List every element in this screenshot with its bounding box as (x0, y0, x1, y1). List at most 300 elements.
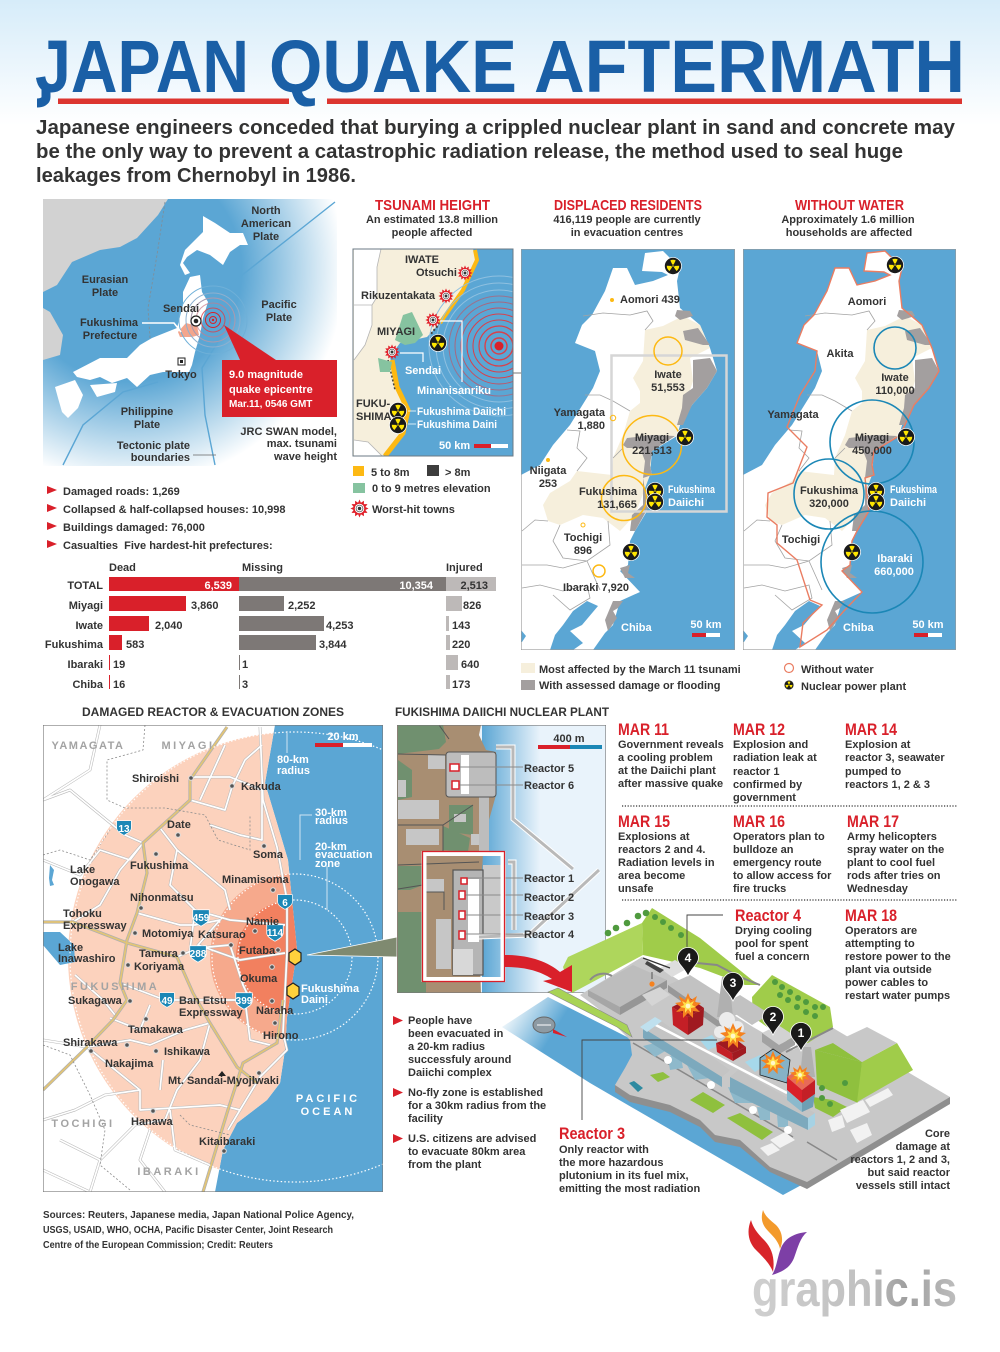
callout pins (678, 948, 812, 1051)
MAR 16: to allow access for (733, 870, 832, 882)
logo: graphic.is (749, 1210, 957, 1317)
evacuation bullets: to evacuate 80km area (408, 1146, 526, 1158)
values: 10,354 (399, 580, 434, 592)
tectonic labels: Plate (92, 287, 118, 299)
values: 640 (461, 659, 479, 671)
place labels: Tamakawa (128, 1024, 184, 1036)
place labels: Katsurao (198, 929, 246, 941)
place labels: Lake (70, 864, 95, 876)
evacuation bullets: Daiichi complex (408, 1067, 493, 1079)
place labels: Expressway (63, 920, 127, 932)
text: reactor 4: fuel a concern (735, 951, 810, 963)
evacuation bullets: been evacuated in (408, 1028, 504, 1040)
green strip patches (650, 1072, 773, 1140)
tectonic labels: Prefecture (83, 330, 137, 342)
place labels: Ban Etsu (179, 995, 227, 1007)
heading: without water: households are affected (786, 227, 912, 239)
water labels (767, 296, 944, 634)
water labels: Iwate (881, 372, 909, 384)
MAR 17 (847, 813, 944, 895)
tsunami labels: 50 km (439, 440, 470, 452)
evacuation bullets: facility (408, 1113, 444, 1125)
timeline: March events (618, 721, 957, 1002)
reactor 2 building (760, 1049, 790, 1083)
place labels: 20-km (315, 841, 347, 853)
back hill (563, 908, 760, 993)
isometric plant illustration (502, 908, 950, 1195)
values: 3 (242, 679, 248, 691)
small front buildings (643, 1043, 788, 1127)
text: reactor 4: pool for spent (735, 938, 809, 950)
place labels: Okuma (240, 973, 278, 985)
MAR 12: radiation leak at (733, 752, 817, 764)
place labels: TOCHIGI (51, 1118, 115, 1130)
values: 173 (452, 679, 470, 691)
MAR 18: Operators are (845, 925, 917, 937)
title (35, 25, 965, 108)
displaced labels: Ibaraki 7,920 (563, 582, 629, 594)
MAR 18: restart water pumps (845, 990, 950, 1002)
tsunami labels: FUKU- (356, 398, 391, 410)
map: tsunami height (352, 248, 514, 456)
water circles (794, 327, 923, 613)
MAR 15 (618, 813, 715, 895)
MAR 14: Explosion at (845, 739, 911, 751)
water labels: Akita (827, 348, 854, 360)
water labels: 320,000 (809, 498, 849, 510)
legend: affected areas: Most affected by the March 11 tsunami (539, 664, 741, 676)
tsunami labels: Rikuzentakata (361, 290, 436, 302)
place labels: Kakuda (241, 781, 282, 793)
smoke plume (714, 1012, 744, 1038)
turbine hall 2 (730, 1070, 815, 1130)
legend: tsunami: 0 to 9 metres elevation (372, 483, 491, 495)
evacuation bullets: from the plant (408, 1159, 482, 1171)
connector line to displaced map (513, 372, 611, 374)
tsunami labels: IWATE (405, 254, 439, 266)
reactor 4 building (672, 998, 704, 1035)
reactor markers (450, 764, 467, 939)
water labels: 660,000 (874, 566, 914, 578)
row labels: TOTAL (67, 580, 103, 592)
MAR 16: Operators plan to (733, 831, 825, 843)
intro text (36, 116, 956, 187)
values: 19 (113, 659, 125, 671)
MAR 17: MAR 17 (847, 813, 899, 831)
tsunami labels: MIYAGI (377, 326, 415, 338)
highway shields: 114 (267, 928, 284, 939)
heading: without water (781, 197, 915, 239)
callout line: reactor 4 (687, 915, 723, 947)
bar chart: casualties: Dead (109, 562, 136, 574)
compass (533, 1017, 567, 1037)
MAR 12: Explosion and (733, 739, 808, 751)
place labels: Expressway (179, 1007, 243, 1019)
tectonic labels: wave height (273, 451, 337, 463)
dotted radius circles (69, 731, 382, 1183)
place labels: radius (315, 815, 348, 827)
missing bars (239, 577, 446, 689)
values: 1 (242, 659, 248, 671)
values: 2,513 (460, 580, 488, 592)
MAR 18: restore power to the (845, 951, 951, 963)
tectonic labels: Fukushima (80, 317, 139, 329)
tectonic labels: Plate (134, 419, 160, 431)
tsunami labels: Fukushima Daiichi (417, 406, 506, 418)
tectonic labels: JRC SWAN model, (240, 426, 337, 438)
place labels: Koriyama (134, 961, 185, 973)
place labels: zone (315, 858, 340, 870)
tsunami labels: Sendai (405, 365, 441, 377)
main buildings (588, 960, 795, 1054)
reactor 3 building (716, 1037, 746, 1061)
place labels: Fukushima (301, 983, 360, 995)
place labels: 80-km (277, 754, 309, 766)
MAR 12: MAR 12 (733, 721, 785, 739)
epicentre callout: Mar.11, 0546 GMT (229, 399, 312, 410)
tsunami labels: Fukushima Daini (417, 419, 497, 431)
place labels: Nihonmatsu (130, 892, 194, 904)
water labels: Tochigi (782, 534, 820, 546)
roads (398, 725, 479, 910)
highway shields: 399 (236, 996, 253, 1007)
tectonic labels: American (241, 218, 291, 230)
MAR 14: reactors 1, 2 & 3 (845, 779, 930, 791)
title: JAPAN (35, 25, 249, 108)
title: AFTERMATH (534, 25, 965, 108)
tectonic labels: Plate (253, 231, 279, 243)
MAR 11: MAR 11 (618, 721, 669, 739)
stacks (717, 977, 815, 1077)
tectonic labels: Eurasian (82, 274, 129, 286)
plant icons (843, 256, 915, 561)
MAR 11: Government reveals (618, 739, 724, 751)
sources: Centre of the European Commission; Credit: Reuters (43, 1239, 273, 1251)
evacuation rings on land (68, 732, 297, 1170)
tsunami labels: Minanisanriku (417, 385, 491, 397)
prefecture borders (43, 725, 250, 1190)
highway shields: 459 (193, 913, 210, 924)
heading: displaced residents: DISPLACED RESIDENTS (554, 197, 702, 214)
bar chart: casualties (45, 562, 496, 691)
tectonic labels: max. tsunami (267, 438, 337, 450)
text: core damage: damage at (896, 1141, 950, 1153)
MAR 16: emergency route (733, 857, 822, 869)
place labels: Namie (246, 916, 279, 928)
displaced labels: 221,513 (632, 445, 672, 457)
page background (0, 0, 1000, 125)
evacuation circles (546, 298, 682, 577)
legend: tsunami: > 8m (445, 467, 471, 479)
place labels: Lake (58, 942, 83, 954)
heading: tsunami height: An estimated 13.8 million (366, 214, 498, 226)
text: reactor 3: Only reactor with (559, 1144, 649, 1156)
displaced labels: Iwate (654, 369, 682, 381)
place labels: 30-km (315, 807, 347, 819)
place labels: Hirono (263, 1030, 299, 1042)
text: core damage: but said reactor (867, 1167, 951, 1179)
reactor labels: Reactor 5 (524, 763, 574, 775)
values: 826 (463, 600, 481, 612)
row labels: Chiba (72, 679, 104, 691)
map: tectonic plates (43, 199, 337, 466)
displaced labels: 50 km (690, 619, 722, 631)
text: reactor 3 (559, 1125, 700, 1195)
row labels (45, 580, 104, 691)
place labels: Shiroishi (132, 773, 179, 785)
MAR 18: MAR 18 (845, 907, 897, 925)
heading: tsunami height: people affected (392, 227, 472, 239)
MAR 14 (845, 721, 945, 791)
water labels: Miyagi (855, 432, 889, 444)
MAR 18: power cables to (845, 977, 928, 989)
water labels: Fukushima (800, 485, 859, 497)
callout line: reactor 3 (582, 1040, 717, 1120)
text: reactor 3: the more hazardous (559, 1157, 664, 1169)
aerial callout lines (459, 767, 523, 934)
sources (43, 1209, 354, 1251)
displaced labels: 131,665 (597, 499, 637, 511)
place labels: Iwaki (252, 1075, 279, 1087)
highway shields: 288 (190, 949, 207, 960)
third hill (815, 1027, 913, 1103)
map: reactor and evacuation zones (43, 725, 383, 1192)
MAR 18: attempting to (845, 938, 915, 950)
reactor labels: Reactor 6 (524, 780, 574, 792)
marker: Tokyo (178, 358, 185, 365)
ground side (615, 1085, 950, 1189)
place labels: Tamura (139, 948, 179, 960)
text: core damage: reactors 1, 2 and 3, (850, 1154, 950, 1166)
text: reactor 4: Reactor 4 (735, 907, 802, 925)
zoom wedge from map to plant (307, 937, 397, 957)
displaced labels: Fukushima (579, 486, 638, 498)
displaced labels (530, 294, 722, 634)
bar chart: casualties: Injured (446, 562, 483, 574)
town dots (89, 776, 280, 1153)
values: 2,040 (155, 620, 183, 632)
heading: without water: WITHOUT WATER (795, 197, 904, 214)
MAR 18 (845, 907, 951, 1002)
displaced labels: Daiichi (668, 497, 704, 509)
map: displaced residents (521, 249, 735, 650)
reactor labels: Reactor 1 (524, 873, 574, 885)
place labels: Shirakawa (63, 1037, 118, 1049)
MAR 11: after massive quake (618, 778, 723, 790)
displaced labels: Tochigi (564, 532, 602, 544)
damage list: Buildings damaged: 76,000 (63, 522, 205, 534)
land (397, 725, 496, 993)
values: 3,860 (191, 600, 219, 612)
place labels: Mt. Sandai-Myoji (168, 1075, 255, 1087)
place labels: Kitaibaraki (199, 1136, 255, 1148)
tectonic labels: Plate (266, 312, 292, 324)
reactor labels (524, 733, 585, 941)
plant icons (622, 257, 694, 561)
row labels: Fukushima (45, 639, 104, 651)
road network (43, 725, 287, 1192)
MAR 18: plant via outside (845, 964, 932, 976)
place labels: Nakajima (105, 1058, 154, 1070)
tsunami labels (356, 254, 506, 452)
dead bars (109, 577, 239, 689)
tectonic labels: Tokyo (165, 369, 197, 381)
legend: tsunami: 5 to 8m (371, 467, 410, 479)
tectonic labels: Pacific (261, 299, 297, 311)
MAR 16: MAR 16 (733, 813, 785, 831)
place labels (51, 731, 373, 1178)
water labels: Chiba (843, 622, 874, 634)
highway shields (117, 821, 292, 1009)
MAR 15: Explosions at (618, 831, 690, 843)
text: reactor 3: emitting the most radiation (559, 1183, 700, 1195)
reactor labels: 400 m (553, 733, 585, 745)
heading: evacuation zones: DAMAGED REACTOR & EVACUATION ZONES (82, 705, 344, 719)
displaced labels: 1,880 (577, 420, 605, 432)
epicentre callout: quake epicentre (229, 384, 313, 396)
legend: tsunami: Worst-hit towns (372, 504, 455, 516)
place labels: Futaba (239, 945, 276, 957)
breakwaters (479, 747, 599, 937)
displaced labels: Aomori 439 (620, 294, 680, 306)
lakes (43, 932, 75, 965)
displaced labels: Miyagi (635, 432, 669, 444)
green patch by reactor 1 (813, 1097, 847, 1117)
values: 3,844 (319, 639, 347, 651)
values: 6,539 (204, 580, 232, 592)
tsunami labels: Otsuchi (416, 267, 457, 279)
callout pins: 1 (798, 1026, 805, 1040)
place labels: Hanawa (131, 1116, 173, 1128)
values: 16 (113, 679, 125, 691)
tsunami labels: SHIMA (356, 411, 392, 423)
MAR 16 (733, 813, 832, 895)
reactor 1 building (787, 1068, 815, 1112)
damage list: Collapsed & half-collapsed houses: 10,998 (63, 504, 286, 516)
heading: plant: FUKISHIMA DAIICHI NUCLEAR PLANT (395, 705, 610, 719)
injured bars (446, 577, 496, 689)
heading: displaced residents (553, 197, 702, 239)
water labels: Yamagata (767, 409, 820, 421)
tectonic labels (80, 205, 337, 464)
sources: Sources: Reuters, Japanese media, Japan National Police Agency, (43, 1209, 354, 1221)
MAR 14: MAR 14 (845, 721, 898, 739)
red frame (424, 854, 503, 980)
logo: graphic.is: graphic.is (752, 1261, 957, 1317)
water labels: Aomori (848, 296, 886, 308)
evacuation bullets: U.S. citizens are advised (408, 1133, 536, 1145)
evacuation bullets: No-fly zone is established (408, 1087, 543, 1099)
MAR 14: pumped to (845, 766, 901, 778)
grey building blocks (398, 755, 479, 969)
helicopter (643, 958, 670, 987)
tectonic labels: Sendai (163, 303, 199, 315)
place labels: Tohoku (63, 908, 102, 920)
MAR 12 (733, 721, 817, 804)
tectonic labels: Tectonic plate (117, 440, 190, 452)
place labels: 20 km (327, 731, 359, 743)
MAR 12: reactor 1 (733, 766, 779, 778)
MAR 11 (618, 721, 724, 790)
place labels: Onogawa (70, 876, 120, 888)
text: core damage: Core (925, 1128, 950, 1140)
logo flame (749, 1210, 807, 1275)
place labels: MIYAGI (161, 740, 215, 752)
MAR 11: a cooling problem (618, 752, 713, 764)
highway shields: 6 (282, 898, 288, 909)
icons: towns and plants (384, 265, 473, 434)
trees (605, 910, 848, 1107)
water labels: Fukushima (890, 484, 938, 496)
reactor labels: Reactor 4 (524, 929, 575, 941)
values: 220 (452, 639, 470, 651)
evacuation bullets: for a 30km radius from the (408, 1100, 546, 1112)
heading: tsunami height: TSUNAMI HEIGHT (375, 197, 490, 214)
white buildings (760, 1088, 893, 1156)
water labels: Ibaraki (877, 553, 913, 565)
place labels: YAMAGATA (52, 740, 124, 752)
MAR 15: reactors 2 and 4. (618, 844, 705, 856)
MAR 17: plant to cool fuel (847, 857, 935, 869)
map: plant aerial (397, 725, 606, 993)
explosions (675, 993, 810, 1084)
heading: displaced residents: in evacuation centres (571, 227, 683, 239)
values: 4,253 (326, 620, 354, 632)
MAR 12: government (733, 792, 796, 804)
MAR 17: Wednesday (847, 883, 909, 895)
place labels: Daini (301, 994, 328, 1006)
tectonic labels: North (251, 205, 281, 217)
damage list: Damaged roads: 1,269 (63, 486, 180, 498)
tectonic labels: boundaries (131, 452, 190, 464)
callout pins: 4 (685, 951, 692, 965)
place labels: Inawashiro (58, 953, 116, 965)
MAR 17: Army helicopters (847, 831, 937, 843)
row labels: Iwate (75, 620, 103, 632)
evacuation bullets: a 20-km radius (408, 1041, 485, 1053)
bar chart: casualties: Missing (242, 562, 283, 574)
text: reactor 4: Drying cooling (735, 925, 812, 937)
epicentre callout: 9.0 magnitude (229, 369, 303, 381)
place labels: Fukushima (130, 860, 189, 872)
callout pins: 3 (730, 976, 737, 990)
place labels: radius (277, 765, 310, 777)
water labels: 110,000 (875, 385, 915, 397)
affected region box (612, 356, 726, 512)
MAR 14: reactor 3, seawater (845, 752, 945, 764)
heading: displaced residents: 416,119 people are currently (553, 214, 702, 226)
place labels: Sukagawa (68, 995, 123, 1007)
text: reactor 3: plutonium in its fuel mix, (559, 1170, 689, 1182)
green areas (398, 725, 473, 993)
place labels: Soma (253, 849, 284, 861)
damage list: Casualties Five hardest-hit prefectures: (63, 540, 273, 552)
legend: affected areas: Nuclear power plant (801, 681, 906, 693)
MAR 15: area become (618, 870, 685, 882)
second hill (752, 975, 833, 1043)
red arrow to illustration (505, 955, 572, 992)
MAR 16: bulldoze an (733, 844, 794, 856)
MAR 15: Radiation levels in (618, 857, 715, 869)
values: 583 (126, 639, 144, 651)
legend: affected areas: With assessed damage or flooding (539, 680, 720, 692)
displaced labels: Fukushima (668, 484, 716, 496)
water labels: 450,000 (852, 445, 892, 457)
heading: without water: Approximately 1.6 million (781, 214, 915, 226)
text: core damage: vessels still intact (856, 1180, 950, 1192)
water (502, 997, 807, 1195)
highway shields: 49 (161, 996, 173, 1007)
